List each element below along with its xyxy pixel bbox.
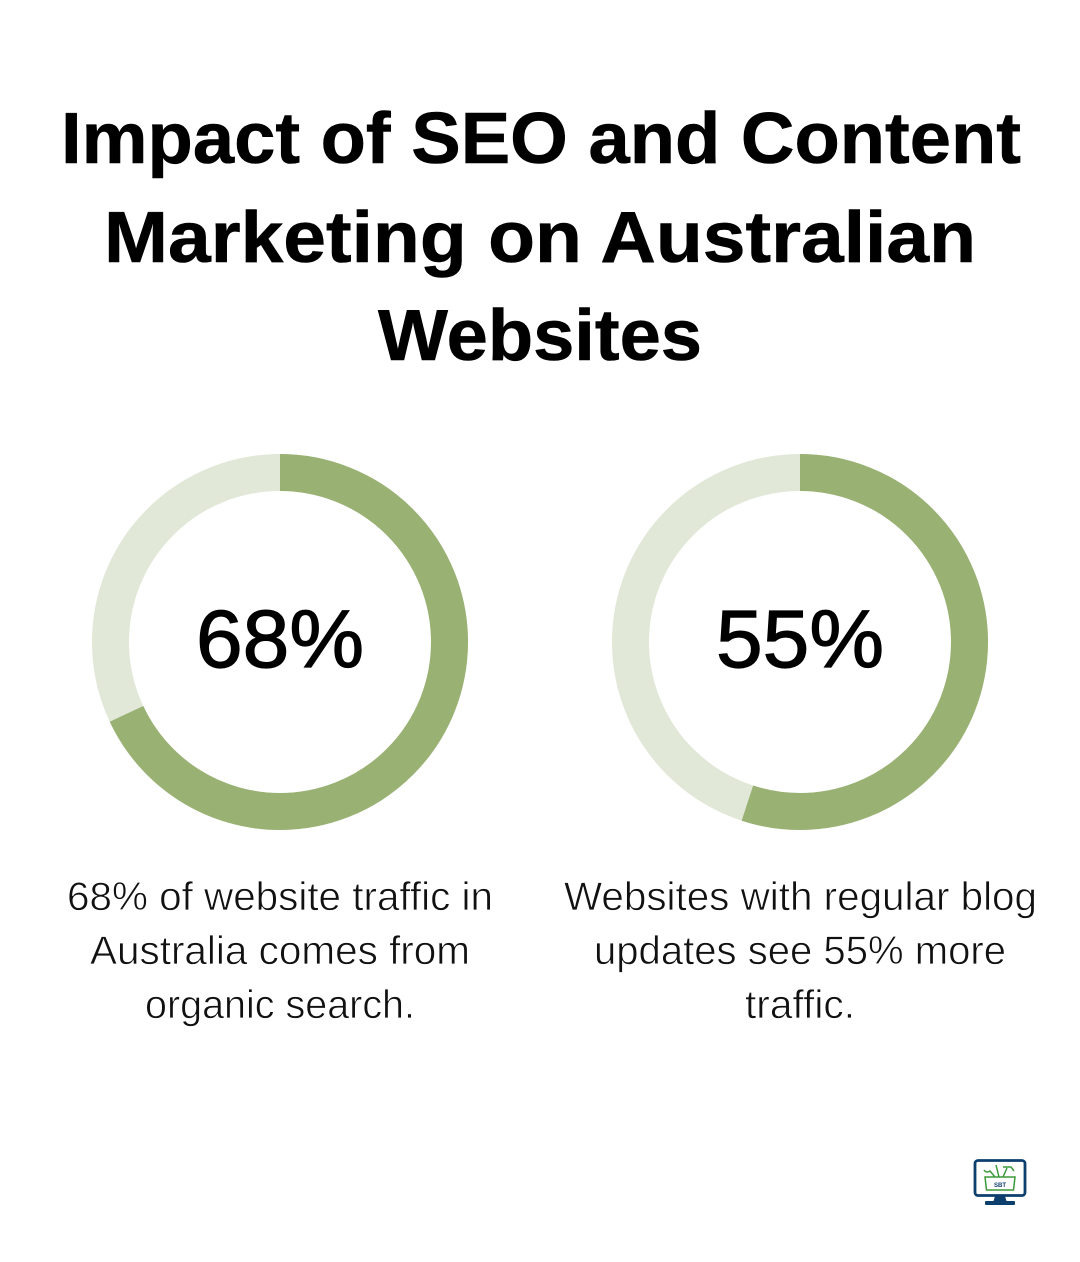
caption: organic search: 68% of website traffic in xyxy=(67,875,493,919)
donut value: 55%: 55% xyxy=(716,594,884,685)
title: Impact of SEO and Content xyxy=(61,99,1021,179)
caption: blog updates: Websites with regular blog xyxy=(564,875,1037,919)
panel: 55% blog updates stat xyxy=(564,472,1037,1027)
caption: organic search xyxy=(67,875,493,1027)
caption: blog updates xyxy=(564,875,1037,1027)
title: Marketing on Australian xyxy=(104,198,976,278)
panel: 68% organic search stat xyxy=(67,472,493,1027)
donut chart: 55% xyxy=(630,472,970,812)
icon: monitor with toolbox logo: SBT xyxy=(994,1183,1006,1189)
donut chart: 68% xyxy=(110,472,450,812)
caption: organic search: organic search. xyxy=(145,983,415,1027)
donut value: 68%: 68% xyxy=(196,594,364,685)
title: Websites xyxy=(378,296,702,376)
caption: blog updates: traffic. xyxy=(745,983,855,1027)
title xyxy=(61,99,1021,376)
caption: blog updates: updates see 55% more xyxy=(594,929,1006,973)
icon: monitor with toolbox logo xyxy=(975,1160,1025,1205)
caption: organic search: Australia comes from xyxy=(90,929,470,973)
